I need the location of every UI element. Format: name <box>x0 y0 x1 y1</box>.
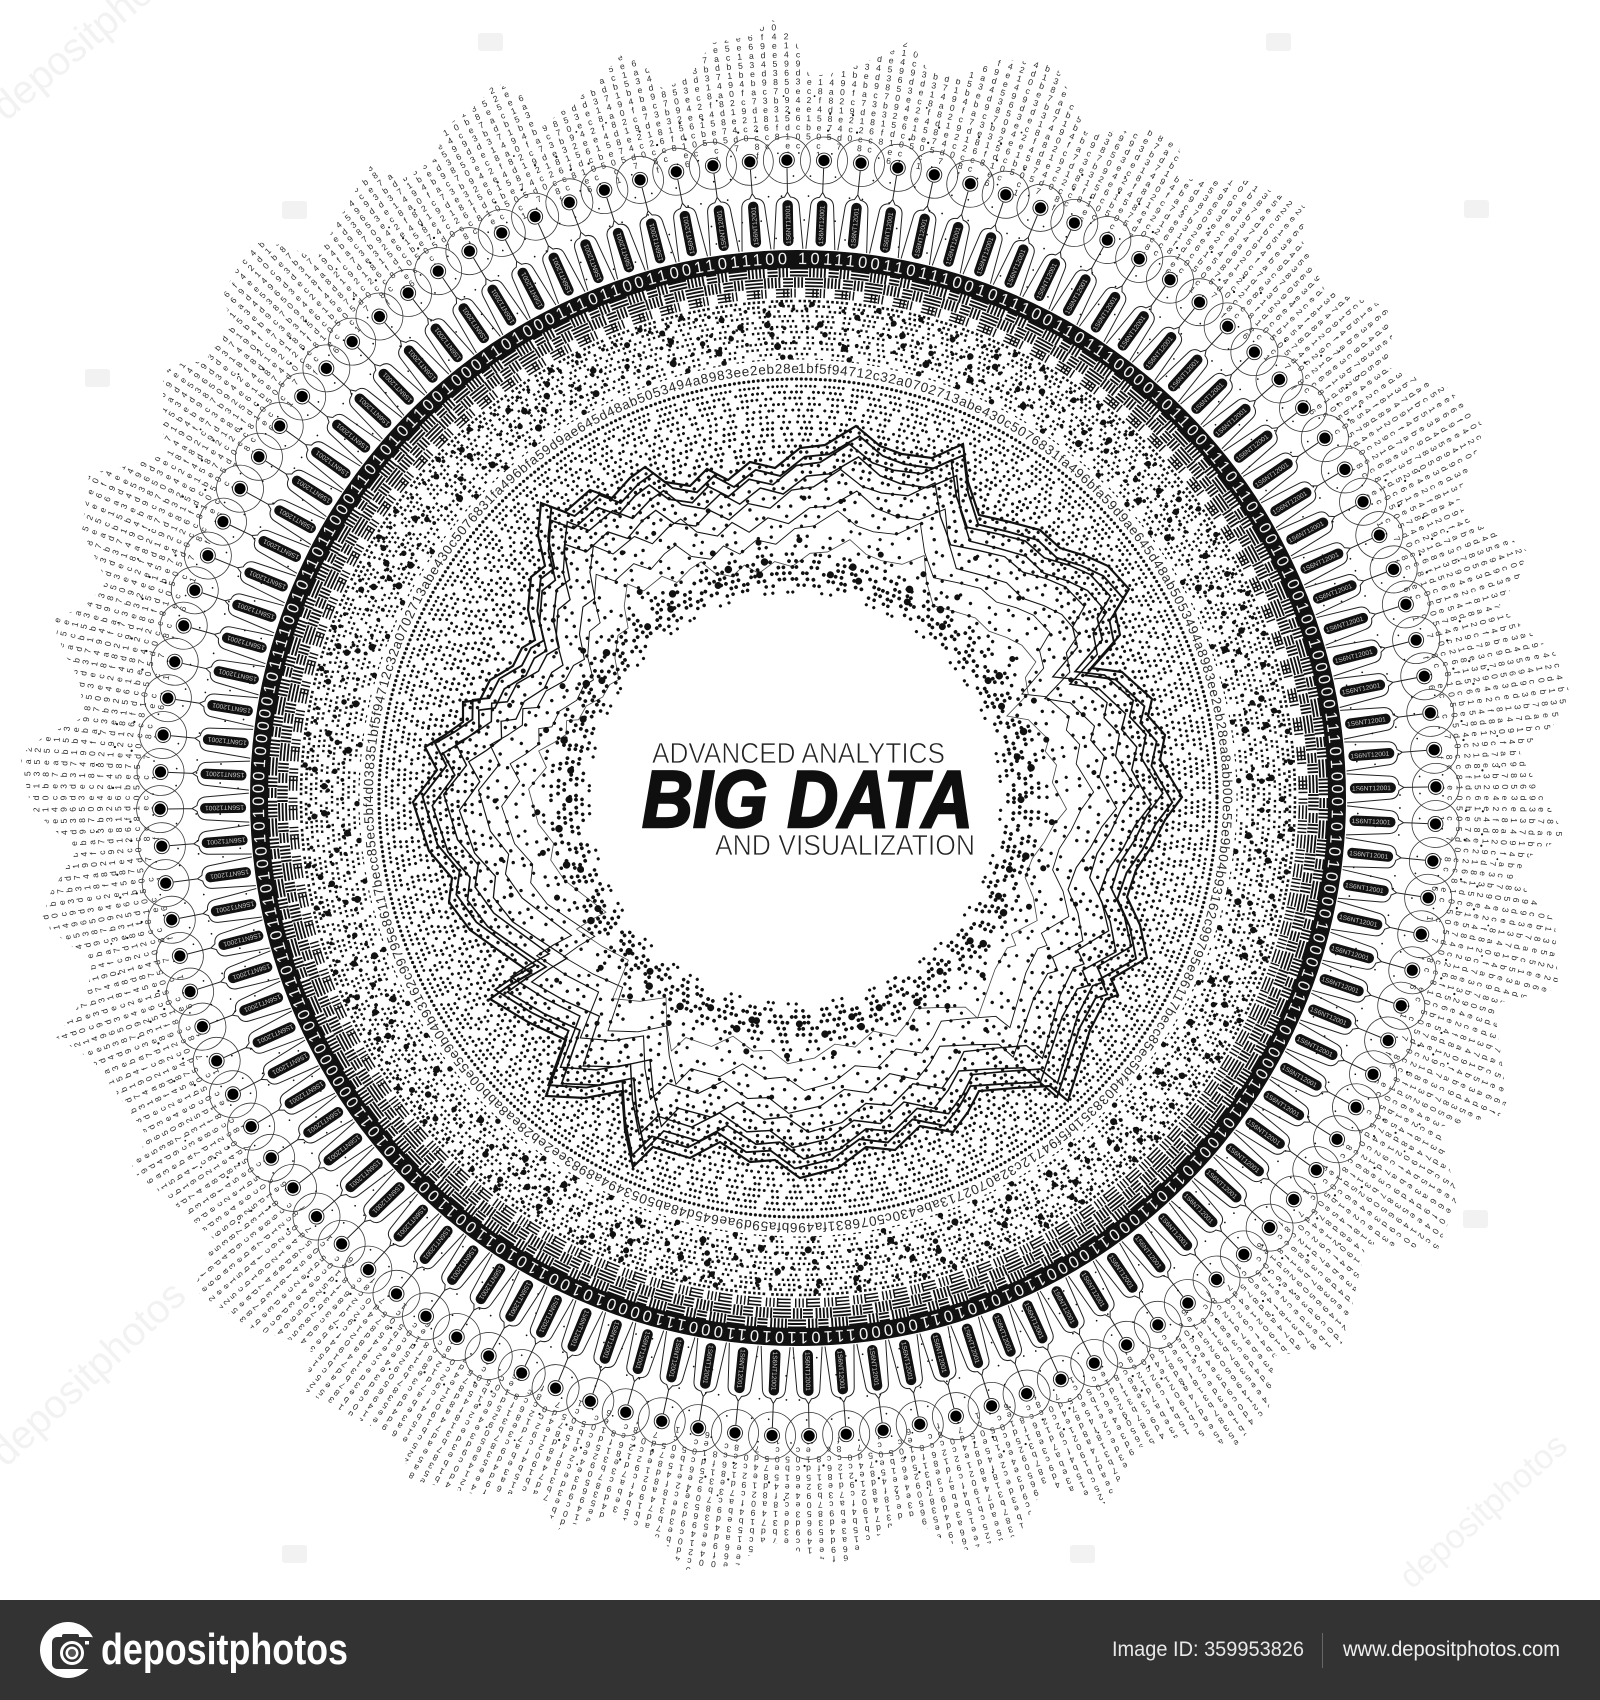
concentric dotted rings and scattered data points <box>225 225 1371 1371</box>
footer bar <box>0 1600 1600 1700</box>
line: advanced analytics: ADVANCED ANALYTICS <box>652 738 945 770</box>
inner cloud of dots around the centre <box>375 378 1215 1218</box>
footer website: www.depositphotos.com <box>1342 1638 1560 1661</box>
hexadecimal text ring <box>360 360 1236 1236</box>
footer image id: Image ID: 359953826 <box>1112 1638 1304 1661</box>
footer logo wordmark: depositphotos <box>101 1625 348 1674</box>
white centre disc <box>595 607 991 987</box>
line: and visualization: AND VISUALIZATION <box>715 830 975 862</box>
watermarks: depositphotos <box>1392 1426 1575 1596</box>
heading: big data: BIG DATA <box>642 755 973 845</box>
polar dot grid <box>109 109 1487 1487</box>
black band with binary digits: 10111001101110010111001101110000101100111011010010100100100000111010001010100001000101110100011110100101101100011000011010101011000001110110101100011100001010011010110011001010101100000010011101101110100101000100000101111001011011000110101011001000110100011101100110011011100 <box>252 252 1344 1344</box>
centre title block <box>642 738 975 862</box>
jagged wave outlines <box>413 426 1182 1178</box>
maze band of tangential and radial line blocks <box>268 268 1328 1328</box>
footer logo icon: camera <box>40 1622 96 1678</box>
hexadecimal text ring: 1bf5f94712c32a0702713abe430c5076831fa496bfa59d9ae645d48ab5053494a8983ee2eb28ea8abb00e55e9b04b93162c99795e86117becc85ec5bf4d038351bf5f94712c32a0702713abe430c5076831fa496bfa59d9ae645d48ab5053494a8983ee2eb28ea8abb00e55e9b04b93162c99795e86117becc85ec5bf4d038351bf5f94712c32a0702713abe430c5076831fa496bfa59d9ae645d48ab5053494a8983ee2eb28ea <box>363 363 1232 1233</box>
